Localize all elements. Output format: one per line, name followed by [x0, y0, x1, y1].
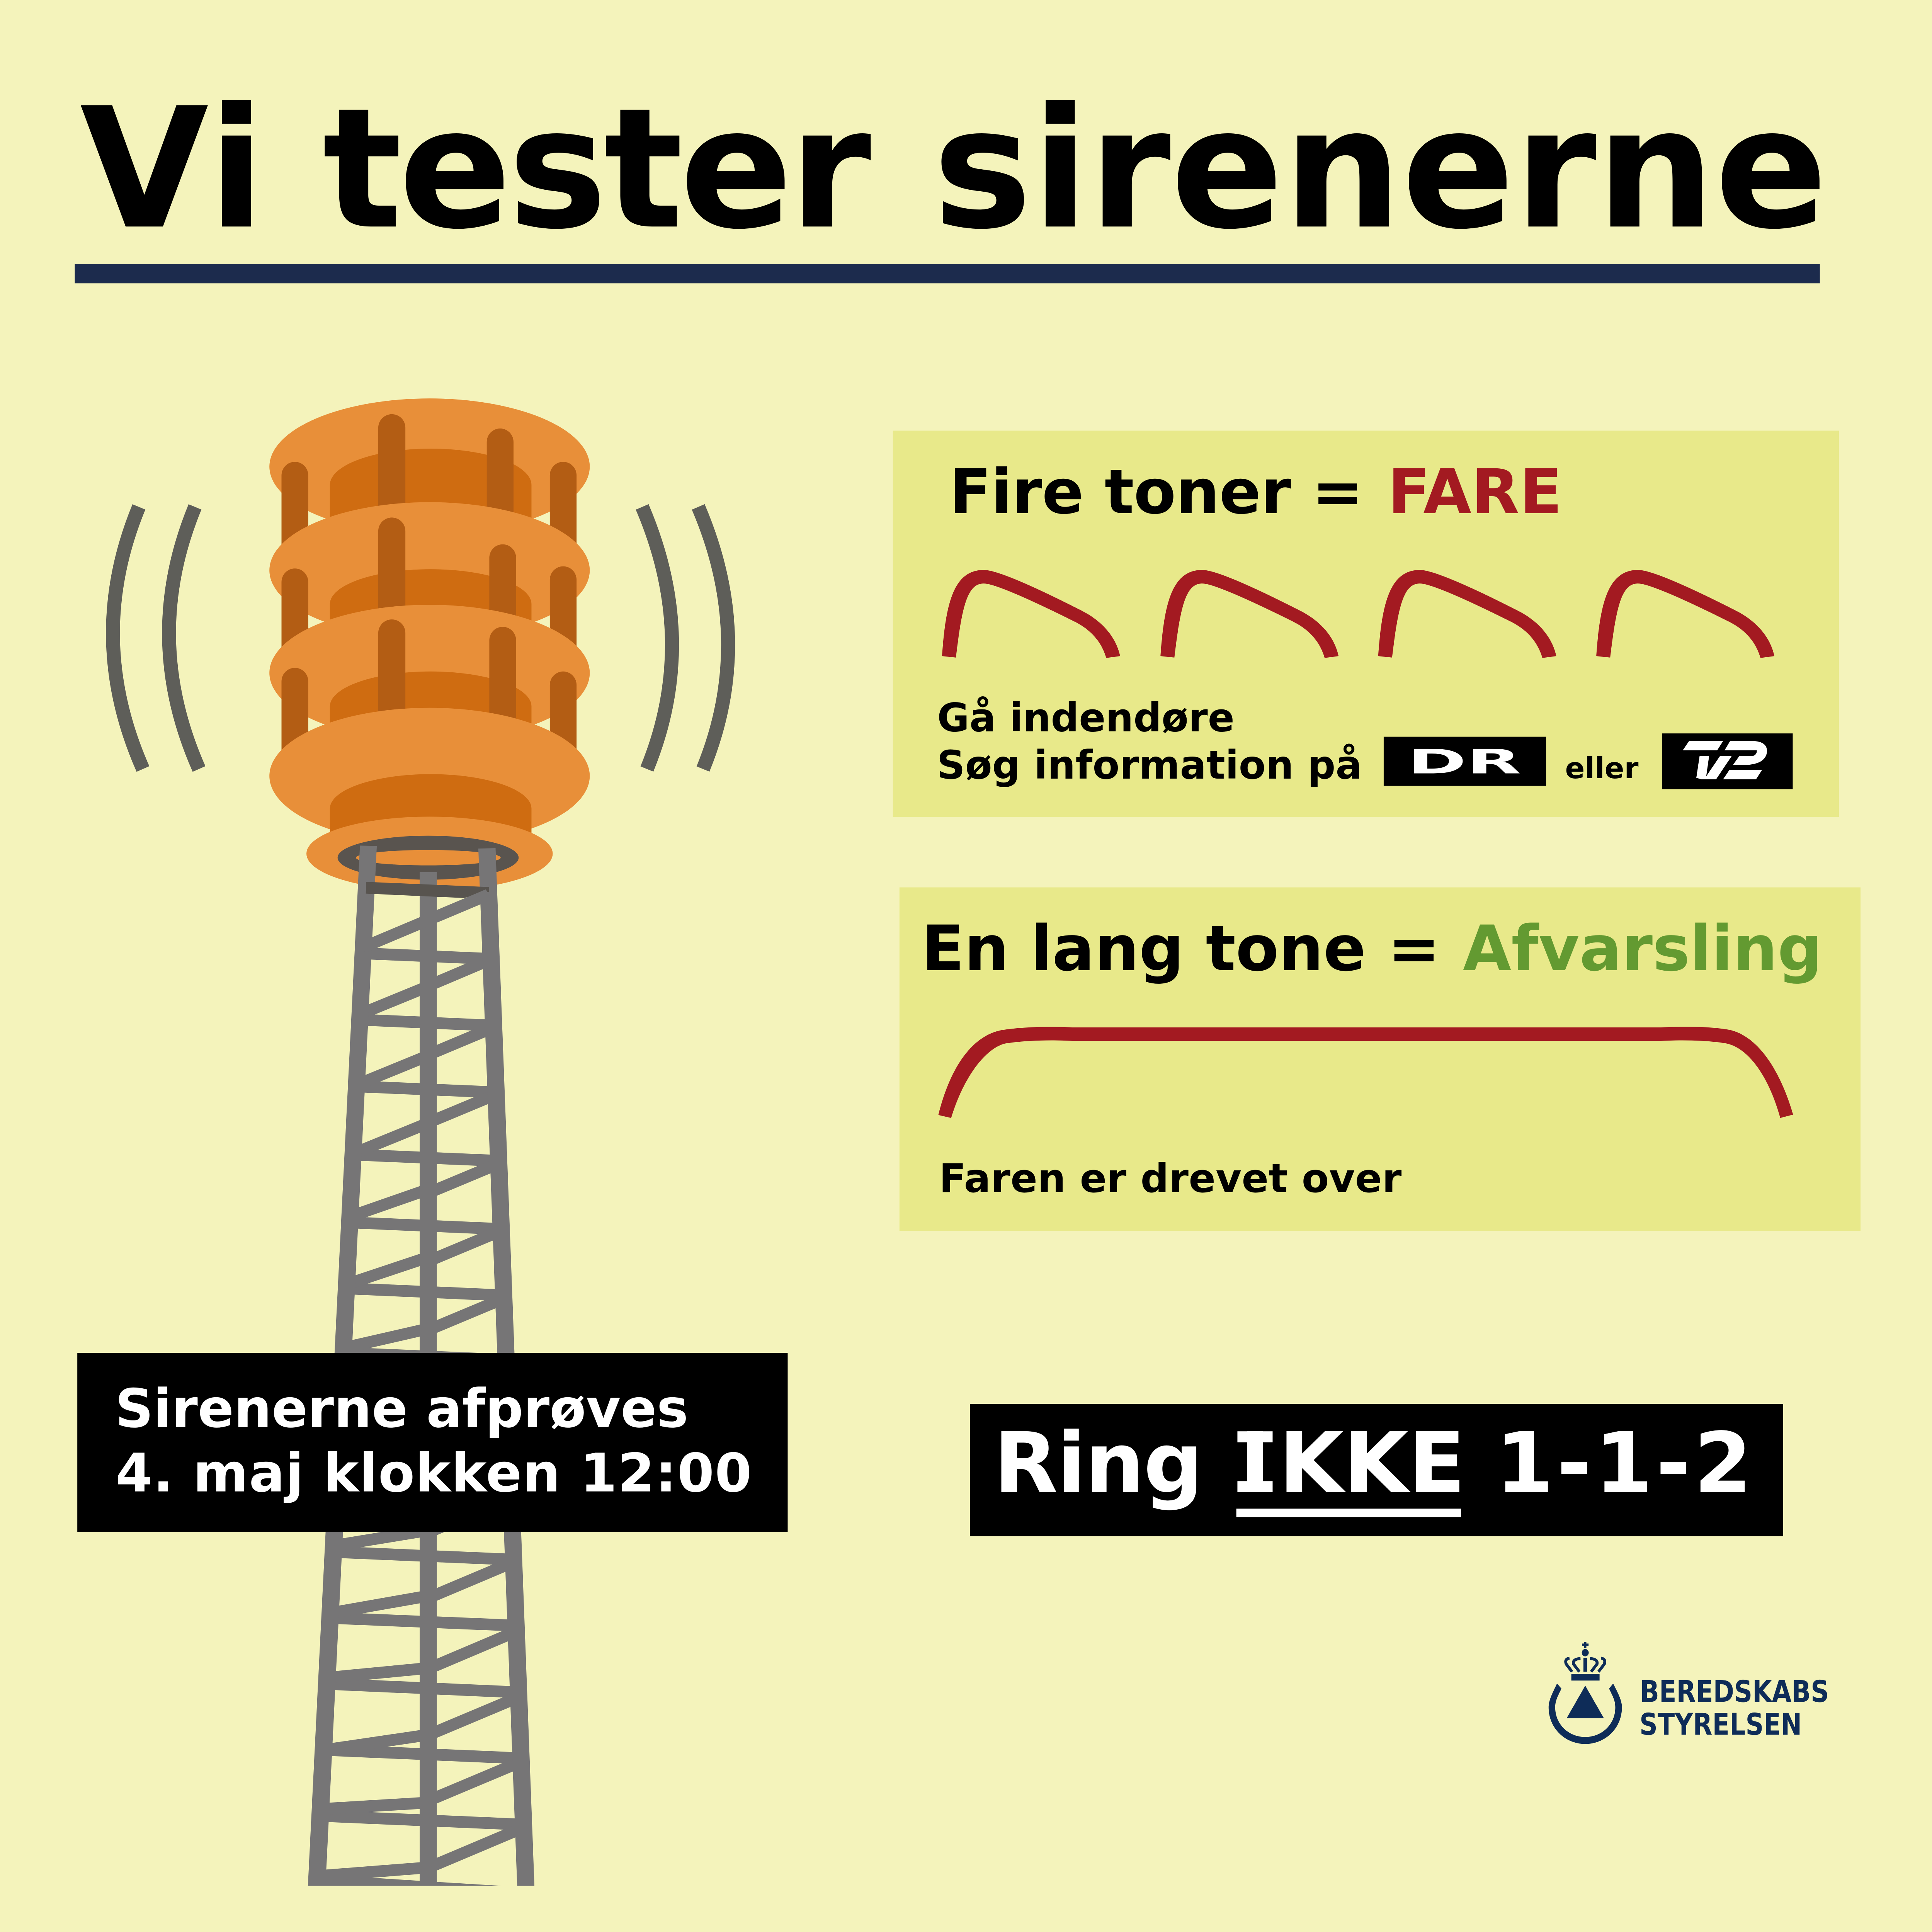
- callout: test date: [77, 1353, 788, 1532]
- callout: do not call 1-1-2: I: [1240, 1415, 1271, 1512]
- heading: en lang tone: En lang tone =: [922, 912, 1440, 985]
- wordmark: BEREDSKABS: [1640, 1674, 1829, 1709]
- siren tower illustration: [113, 398, 728, 1893]
- instruction: go indoors: Gå indendøre: [937, 695, 1235, 740]
- text: danger is over: Faren er drevet over: [939, 1156, 1402, 1202]
- dark cross brace: [366, 882, 489, 898]
- panel: one long tone all clear: [900, 888, 1861, 1231]
- title underline: [75, 264, 1820, 283]
- logo: Beredskabsstyrelsen: STYRELSEN: [1639, 1708, 1802, 1742]
- logo: DR: DR: [1408, 742, 1521, 782]
- siren horn tier 1: [269, 398, 590, 587]
- callout: do not call 1-1-2: Ring: [994, 1415, 1203, 1512]
- logo: TV2: [1662, 733, 1793, 789]
- mounting ring: [338, 836, 519, 880]
- emblem: [1549, 1642, 1622, 1744]
- sound waves left: [113, 507, 199, 769]
- title: Vi: [80, 72, 265, 266]
- sound waves right: [642, 507, 728, 769]
- logo: Beredskabsstyrelsen: [1549, 1642, 1829, 1744]
- callout: do not call 1-1-2: 1-1-2: [1495, 1415, 1752, 1512]
- heading: fare: FARE: [1388, 456, 1562, 528]
- mast rungs: [316, 953, 526, 1893]
- mast diagonals: [315, 959, 523, 1876]
- heading: afvarsling: Afvarsling: [1463, 912, 1822, 985]
- top diagonal brace: [363, 895, 488, 947]
- heading: fire toner: Fire toner =: [949, 456, 1364, 528]
- callout: do not call 1-1-2: KKE: [1279, 1415, 1466, 1512]
- logo: DR: [1384, 737, 1546, 786]
- callout: test date: 4. maj klokken 12:00: [116, 1442, 752, 1504]
- title: [80, 72, 1828, 266]
- callout: test date: Sirenerne afprøves: [115, 1378, 688, 1440]
- instruction: seek information: Søg information på: [937, 742, 1362, 788]
- long tone curve: [938, 1027, 1793, 1118]
- siren horn tier 3: [269, 605, 590, 792]
- panel: four tones danger: [893, 431, 1839, 817]
- title: tester: [323, 72, 872, 266]
- tone curves: [942, 570, 1774, 658]
- callout: do not call 1-1-2: [970, 1404, 1783, 1536]
- text: eller: eller: [1565, 751, 1638, 785]
- siren horn tier 2: [269, 502, 590, 689]
- siren horn tier 4: [269, 708, 590, 844]
- mast legs: [308, 845, 534, 1886]
- title: sirenerne: [933, 72, 1828, 266]
- lattice mast: [308, 845, 534, 1893]
- siren base plate: [306, 816, 553, 891]
